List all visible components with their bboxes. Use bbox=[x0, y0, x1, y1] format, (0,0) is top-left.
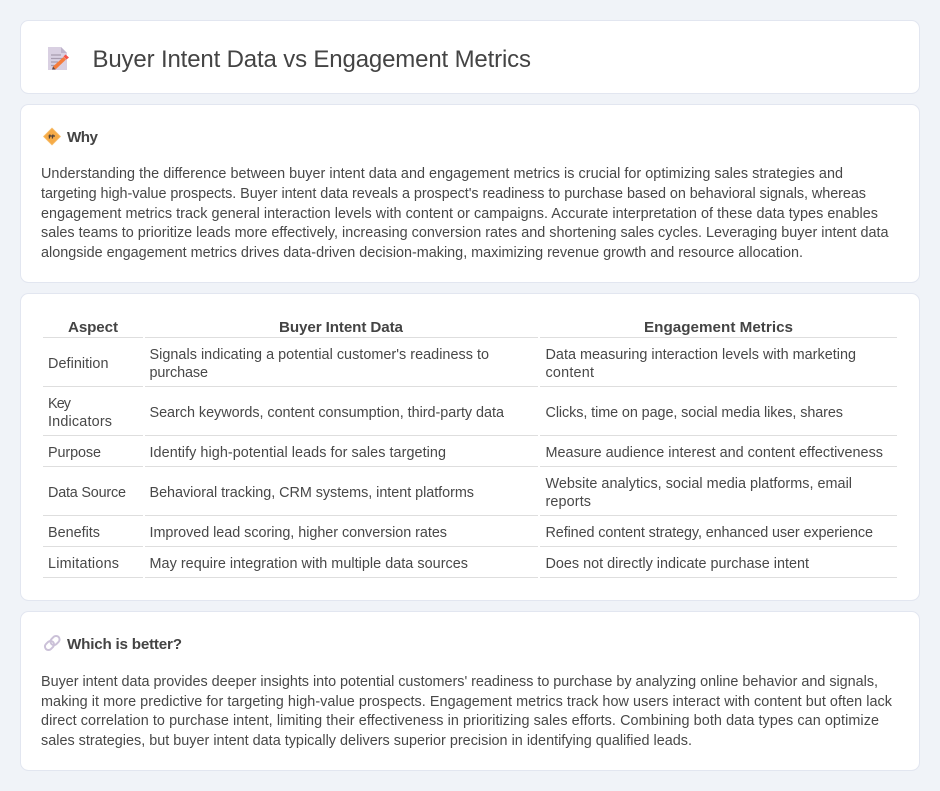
row: limitations: May require integration with multiple data sources bbox=[150, 556, 468, 572]
row: purpose bbox=[48, 445, 883, 461]
text block: why paragraph: alongside engagement metrics drives data-driven decision-making, maximizing revenue growth and resource allocation. bbox=[41, 245, 803, 261]
row: key indicators: Search keywords, content consumption, third-party data bbox=[150, 405, 504, 421]
row: definition: purchase bbox=[150, 365, 208, 381]
row: definition bbox=[48, 347, 856, 381]
row: data source: Data Source bbox=[48, 485, 126, 501]
row: key indicators: Key bbox=[48, 396, 72, 412]
panel: why bbox=[20, 104, 920, 282]
heading: why: Why bbox=[67, 129, 99, 146]
table header: Engagement Metrics bbox=[644, 319, 793, 336]
table header bbox=[68, 319, 793, 336]
row: definition: Signals indicating a potential customer's readiness to bbox=[150, 347, 489, 363]
row: limitations: Limitations bbox=[48, 556, 119, 572]
row: purpose: Purpose bbox=[48, 445, 101, 461]
text block: which is better paragraph: Buyer intent data provides deeper insights into potential customers' readiness to purchase by analyzing online behavior and signals, bbox=[41, 674, 878, 690]
icon: document with pencil bbox=[48, 47, 69, 70]
text block: why paragraph: sales teams to prioritize leads more effectively, increasing conversion rates and shortening sales cycles. Leveraging buyer intent data bbox=[41, 225, 888, 241]
text block: why paragraph: Understanding the difference between buyer intent data and engagement metrics is crucial for optimizing sales strategies and bbox=[41, 166, 843, 182]
title: Buyer Intent Data vs Engagement Metrics bbox=[92, 46, 531, 73]
row: limitations bbox=[48, 556, 809, 572]
panel: which is better bbox=[20, 612, 920, 770]
row: key indicators: Clicks, time on page, social media likes, shares bbox=[546, 405, 843, 421]
row: purpose: Measure audience interest and content effectiveness bbox=[546, 445, 883, 461]
text block: why paragraph: targeting high-value prospects. Buyer intent data reveals a prospect's readiness to purchase based on behavioral signals, whereas bbox=[41, 186, 866, 202]
panel: header bbox=[20, 20, 920, 94]
table header: Buyer Intent Data bbox=[279, 319, 404, 336]
text block: why paragraph bbox=[41, 166, 888, 261]
row: limitations: Does not directly indicate purchase intent bbox=[546, 556, 809, 572]
row: definition: Data measuring interaction levels with marketing bbox=[546, 347, 856, 363]
text block: why paragraph: engagement metrics track general interaction levels with content or campaigns. Accurate interpretation of these data types enables bbox=[41, 206, 878, 222]
text block: which is better paragraph: direct correlation to purchase intent, limiting their effectiveness in prioritizing sales efforts. Combining both data types can optimize bbox=[41, 713, 879, 729]
row: data source: Website analytics, social media platforms, email bbox=[546, 476, 852, 492]
row: benefits: Improved lead scoring, higher conversion rates bbox=[150, 525, 447, 541]
row: purpose: Identify high-potential leads for sales targeting bbox=[150, 445, 446, 461]
row: definition: Definition bbox=[48, 356, 108, 372]
text block: which is better paragraph bbox=[41, 674, 893, 749]
heading: which is better: Which is better? bbox=[67, 636, 182, 653]
row: benefits bbox=[48, 525, 873, 541]
row: data source: Behavioral tracking, CRM systems, intent platforms bbox=[150, 485, 474, 501]
text block: which is better paragraph: making it more predictive for targeting high-value prospects. Engagement metrics track how users interact with content but often lack bbox=[41, 694, 893, 710]
row: benefits: Benefits bbox=[48, 525, 100, 541]
row: key indicators: Indicators bbox=[48, 414, 112, 430]
table header: Aspect bbox=[68, 319, 118, 336]
row: benefits: Refined content strategy, enhanced user experience bbox=[546, 525, 873, 541]
panel: comparison table bbox=[20, 294, 920, 600]
row: key indicators bbox=[48, 396, 843, 430]
row: data source bbox=[48, 476, 852, 510]
row: data source: reports bbox=[546, 494, 591, 510]
row: definition: content bbox=[546, 365, 594, 381]
text block: which is better paragraph: sales strategies, but buyer intent data typically delivers superior precision in identifying qualified leads. bbox=[41, 733, 692, 749]
icon: warning diamond bbox=[44, 128, 60, 145]
icon: chain link bbox=[43, 634, 61, 652]
